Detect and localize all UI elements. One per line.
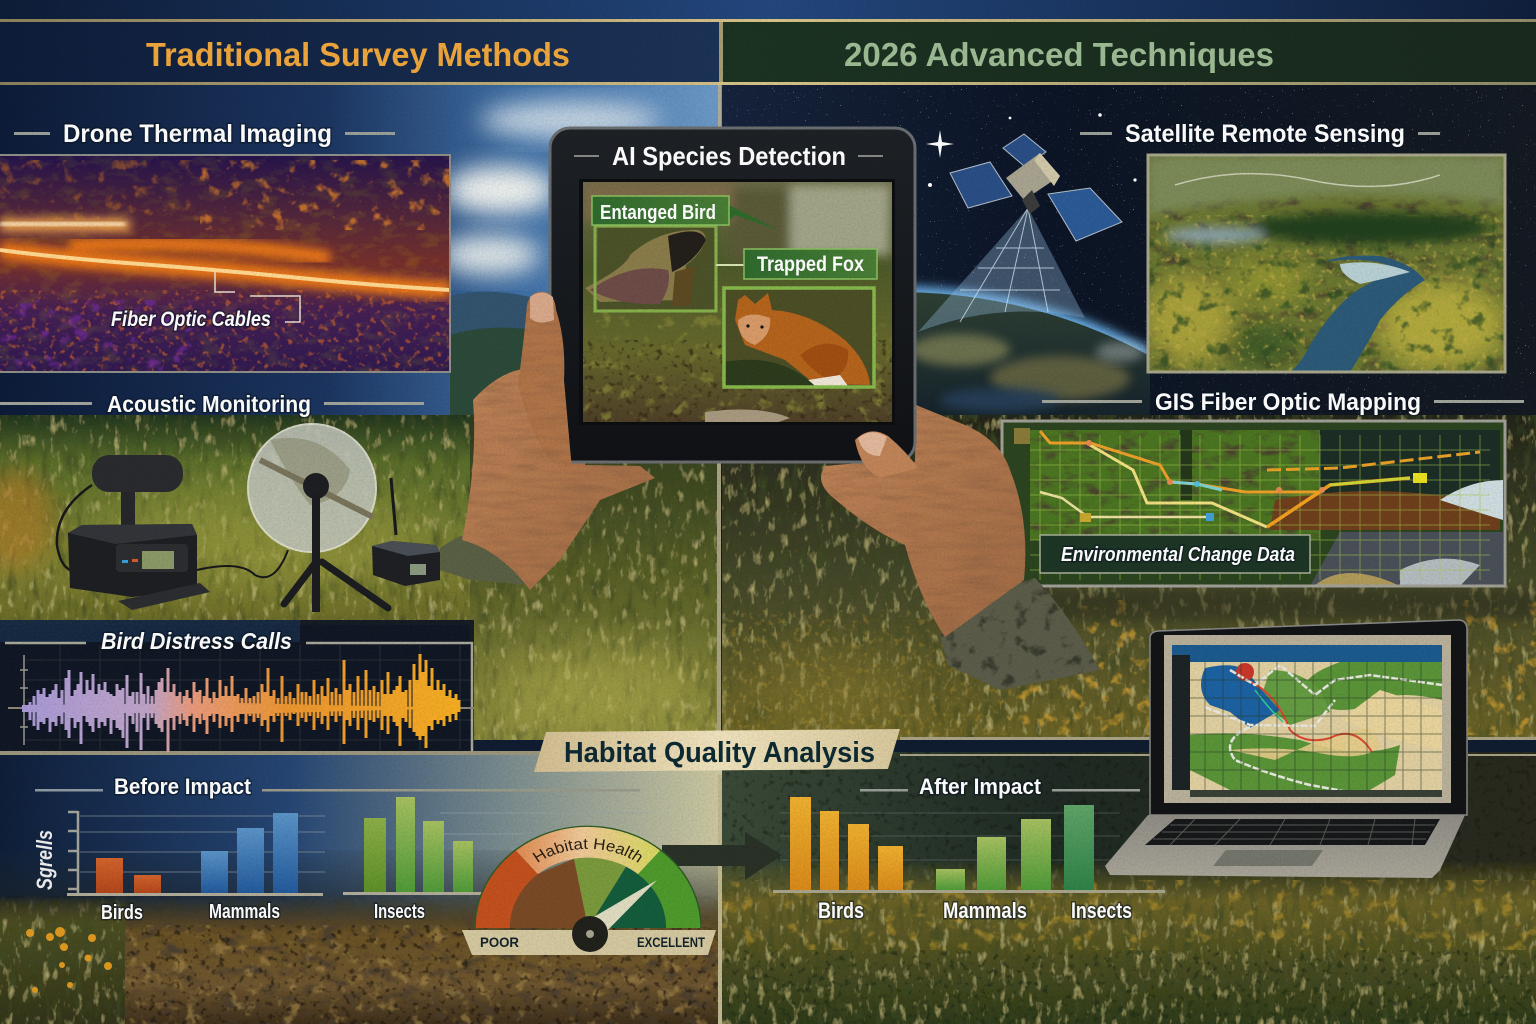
heading: GIS Fiber Optic Mapping — [1042, 389, 1524, 416]
chart: before impact bars — [32, 797, 650, 896]
label: Habitat Health: Habitat Health — [532, 838, 642, 863]
labels: after impact categories: Birds — [818, 898, 864, 923]
panel frame: GIS — [1002, 421, 1505, 586]
icon: small recorder — [372, 478, 440, 586]
panel: bird distress calls — [0, 620, 540, 755]
labels: before impact categories: Mammals — [209, 901, 280, 923]
connector — [716, 264, 744, 266]
panel: left sky backdrop — [0, 85, 722, 420]
panel: lower left backdrop — [0, 752, 722, 1024]
arrow: before to after — [662, 832, 782, 880]
icon: parabolic dish on tripod — [248, 424, 388, 612]
chart: gauge Habitat Health: EXCELLENT — [637, 934, 705, 950]
icon: sparkling stars — [926, 113, 1137, 187]
chart: gauge Habitat Health: POOR — [480, 934, 519, 950]
chart: gauge Habitat Health — [462, 826, 716, 955]
label: Fiber Optic Cables: Fiber Optic Cables — [111, 308, 271, 331]
heading: Acoustic Monitoring: Acoustic Monitoring — [107, 391, 311, 417]
panel: right space backdrop — [722, 85, 1536, 420]
icon: yellow wildflowers — [26, 927, 112, 993]
icon: left thumb over tablet — [518, 292, 572, 470]
label: Entanged Bird — [592, 196, 778, 230]
header rules — [0, 19, 1536, 85]
panel: lower right backdrop — [722, 752, 1536, 1024]
labels: after impact categories: Mammals — [943, 898, 1027, 923]
icon: left hand behind tablet — [440, 368, 655, 590]
title: 2026 Advanced Techniques: 2026 Advanced Techniques — [844, 36, 1274, 73]
labels: before impact categories: Insects — [374, 901, 425, 923]
laptop map — [1190, 662, 1442, 795]
heading: After Impact: After Impact — [919, 774, 1042, 799]
header: left background — [0, 22, 719, 82]
title: Traditional Survey Methods: Traditional Survey Methods — [146, 36, 570, 73]
label: Trapped Fox — [744, 249, 877, 279]
icon: right thumb over tablet — [855, 431, 918, 478]
needle — [580, 880, 657, 940]
heading: AI Species Detection: AI Species Detection — [612, 141, 846, 171]
chart: before impact bars: Sgrells — [32, 830, 57, 890]
panel: drone thermal image — [0, 155, 450, 372]
label strip: poor to excellent — [462, 930, 716, 955]
panel: right grass field — [722, 415, 1536, 740]
heading: Bird Distress Calls: Bird Distress Calls — [101, 628, 292, 654]
chart: waveform — [30, 654, 459, 752]
heading: Before Impact: Before Impact — [114, 774, 252, 799]
label: Entanged Bird: Entanged Bird — [600, 202, 716, 224]
header: right background — [723, 22, 1536, 82]
banner: Habitat Quality Analysis — [534, 729, 900, 772]
animal: fox — [725, 290, 873, 386]
heading: GIS Fiber Optic Mapping: GIS Fiber Optic Mapping — [1155, 389, 1421, 416]
icon: satellite with beam — [918, 134, 1122, 332]
label: Trapped Fox: Trapped Fox — [757, 253, 864, 276]
icon: laptop with habitat map — [1105, 620, 1467, 878]
panel: satellite landscape — [1145, 155, 1505, 372]
panel frame: satellite — [1148, 155, 1505, 372]
labels: before impact categories: Birds — [101, 902, 143, 924]
panel: left grass field — [0, 415, 480, 625]
box: fox detection — [724, 288, 874, 387]
heading: Drone Thermal Imaging: Drone Thermal Imaging — [63, 120, 332, 148]
banner: Habitat Quality Analysis: Habitat Quality Analysis — [564, 737, 875, 769]
panel: GIS map — [1002, 420, 1505, 586]
panel: tablet — [550, 128, 915, 462]
heading: Satellite Remote Sensing: Satellite Remote Sensing — [1125, 120, 1405, 148]
panel frame: drone — [0, 155, 450, 372]
box: bird detection — [595, 226, 716, 311]
labels: after impact categories: Insects — [1071, 898, 1132, 923]
icon: recorder with shotgun microphone — [57, 455, 288, 610]
top band — [0, 0, 1536, 20]
tablet screen scene — [583, 182, 892, 425]
icon: right hand — [821, 405, 1100, 690]
labels: after impact categories — [818, 898, 1132, 923]
planet earth — [916, 278, 1150, 415]
heading: Acoustic Monitoring — [0, 391, 424, 417]
label: Environmental Change Data — [1040, 535, 1310, 573]
field colour variation — [0, 470, 1536, 735]
labels: before impact categories — [101, 901, 425, 924]
animal: bird — [585, 228, 714, 309]
panel: center grass field — [470, 415, 720, 740]
divider lines — [717, 85, 1536, 1024]
label: Environmental Change Data: Environmental Change Data — [1061, 544, 1295, 566]
chart: after impact bars — [773, 797, 1165, 893]
